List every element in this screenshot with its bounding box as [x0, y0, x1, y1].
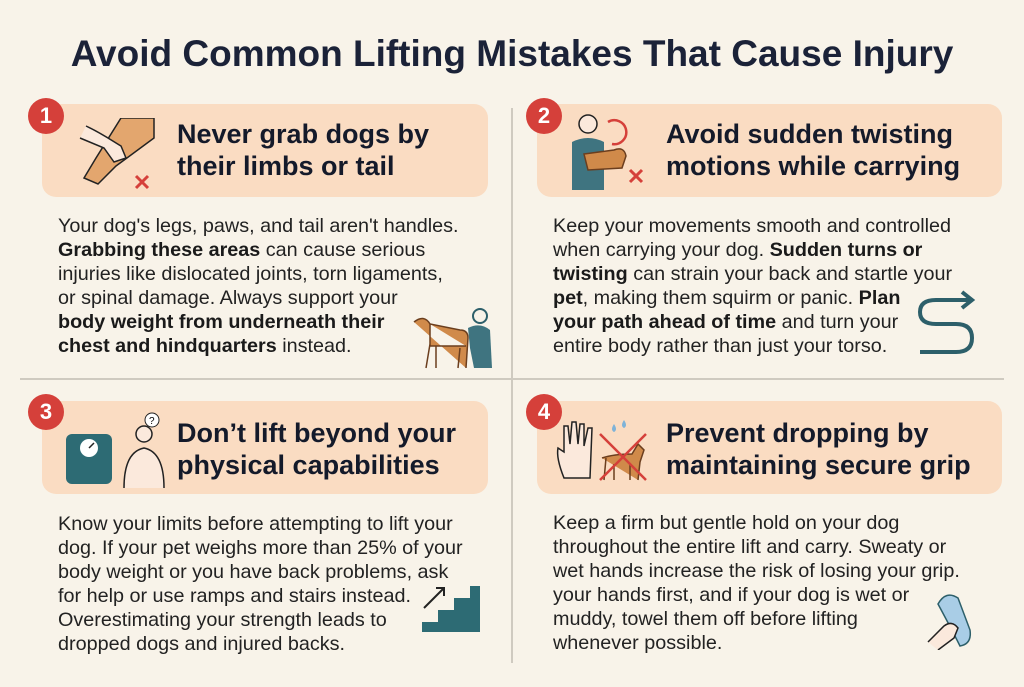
heading 3: Don’t lift beyond your: [177, 418, 456, 448]
body text 2: your path ahead of time and turn your: [553, 311, 898, 333]
icon: scale and back: ?: [149, 416, 155, 427]
icon: person twisting with dog: [572, 114, 643, 190]
badge 1: 1: [40, 103, 52, 128]
heading 2: motions while carrying: [666, 151, 960, 181]
title: Avoid Common Lifting Mistakes That Cause Injury: [71, 33, 953, 74]
body text 1: Grabbing these areas can cause serious: [58, 239, 425, 261]
body text 1: injuries like dislocated joints, torn ligaments,: [58, 263, 443, 285]
body text 4: [553, 512, 960, 654]
body text 1: body weight from underneath their: [58, 311, 384, 333]
body text 2: [553, 215, 952, 357]
body text 2: Keep your movements smooth and controlled: [553, 215, 951, 237]
body text 4: whenever possible.: [553, 632, 722, 654]
body text 4: wet hands increase the risk of losing your grip.: [553, 560, 960, 582]
body text 4: muddy, towel them off before lifting: [553, 608, 858, 630]
badge 4: [526, 394, 562, 430]
heading 4: maintaining secure grip: [666, 450, 971, 480]
icon: scale and back: [66, 412, 165, 488]
header box 3: [42, 401, 488, 494]
badge 4: 4: [538, 399, 550, 424]
body text 3: body weight or you have back problems, ask: [58, 561, 448, 583]
icon: stairs: [422, 586, 480, 632]
badge 3: 3: [40, 399, 52, 424]
body text 1: or spinal damage. Always support your: [58, 287, 398, 309]
badge 1: [28, 98, 64, 134]
heading 3: [177, 418, 456, 480]
icon: hand grabbing paw: [80, 118, 155, 189]
body text 3: for help or use ramps and stairs instead.: [58, 585, 411, 607]
panel 4: [526, 394, 1002, 654]
heading 4: [666, 418, 971, 480]
badge 2: 2: [538, 103, 550, 128]
body text 2: pet, making them squirm or panic. Plan: [553, 287, 900, 309]
heading 1: Never grab dogs by: [177, 119, 429, 149]
heading 3: physical capabilities: [177, 450, 440, 480]
body text 3: dropped dogs and injured backs.: [58, 633, 345, 655]
body text 4: throughout the entire lift and carry. Sweaty or: [553, 536, 946, 558]
icon: hand with towel: [928, 594, 972, 650]
body text 3: Know your limits before attempting to lift your: [58, 513, 453, 535]
body text 1: [58, 215, 459, 357]
body text 2: when carrying your dog. Sudden turns or: [553, 239, 922, 261]
icon: hand, drops, crossed dog: [556, 420, 647, 481]
body text 3: Overestimating your strength leads to: [58, 609, 387, 631]
header box 4: [537, 401, 1002, 494]
header box 2: [537, 104, 1002, 197]
header box 1: [42, 104, 488, 197]
heading 4: Prevent dropping by: [666, 418, 929, 448]
panel 3: [28, 394, 488, 655]
panel 1: [28, 98, 492, 368]
body text 3: [58, 513, 463, 655]
icon: S-curve arrow: [918, 290, 976, 354]
badge 3: [28, 394, 64, 430]
panel 2: [526, 98, 1002, 357]
heading 1: their limbs or tail: [177, 151, 395, 181]
body text 2: twisting can strain your back and startle your: [553, 263, 952, 285]
heading 2: [666, 119, 960, 181]
body text 4: Keep a firm but gentle hold on your dog: [553, 512, 899, 534]
body text 1: chest and hindquarters instead.: [58, 335, 352, 357]
badge 2: [526, 98, 562, 134]
heading 2: Avoid sudden twisting: [666, 119, 953, 149]
body text 2: entire body rather than just your torso.: [553, 335, 887, 357]
icon: person with dog: [414, 308, 492, 368]
body text 1: Your dog's legs, paws, and tail aren't handles.: [58, 215, 459, 237]
body text 3: dog. If your pet weighs more than 25% of your: [58, 537, 463, 559]
heading 1: [177, 119, 429, 181]
body text 4: your hands first, and if your dog is wet or: [553, 584, 909, 606]
